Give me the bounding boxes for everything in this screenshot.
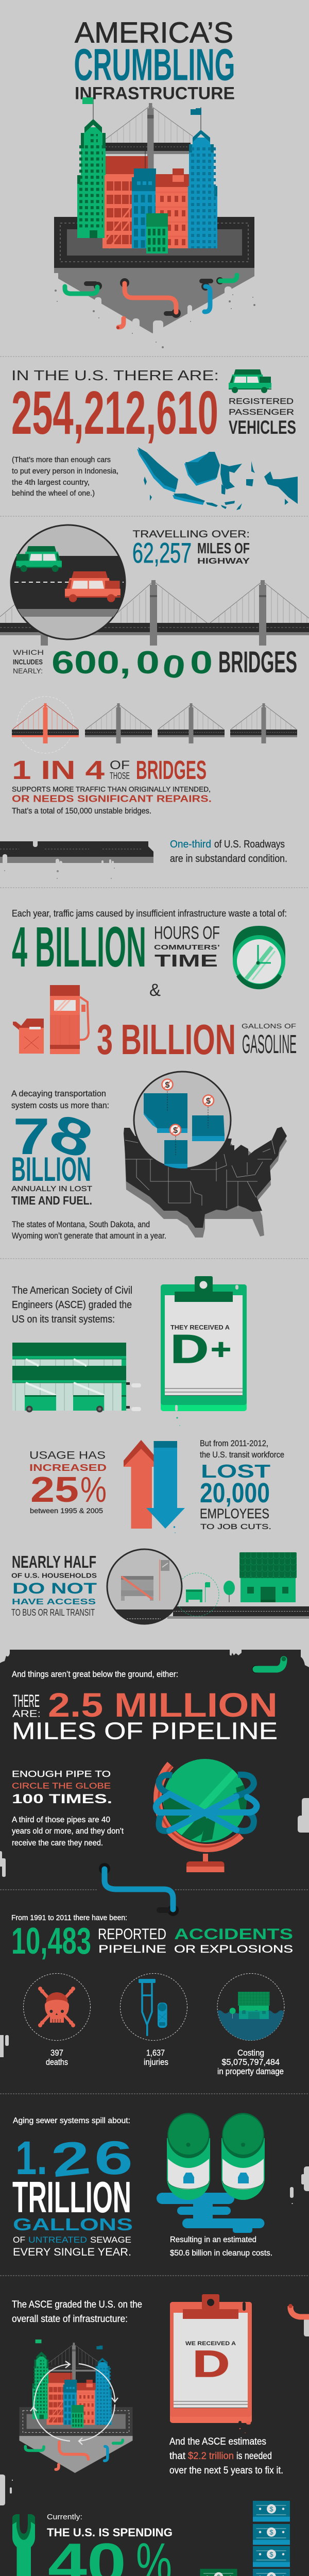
icon: red car in lens	[65, 571, 121, 602]
stat: commuters' time: COMMUTERS’	[154, 943, 220, 951]
icon: green car	[229, 369, 271, 393]
labels: deaths, injuries, damage	[46, 2048, 284, 2076]
pipe: green top right	[252, 1657, 286, 1673]
stat: 78 billion: 7	[13, 1108, 50, 1165]
text: overall grade intro	[12, 2299, 142, 2325]
stat: pipeline accidents: OR EXPLOSIONS	[174, 1943, 293, 1955]
icon: no-dollar signs: $	[173, 1126, 178, 1135]
magnifier: cars on the highway	[11, 525, 125, 639]
text: circle the globe: CIRCLE THE GLOBE	[12, 1782, 111, 1791]
text: circle the globe: A third of those pipes are 40	[12, 1816, 110, 1824]
stat: workforce lost: the U.S. transit workforce	[200, 1450, 284, 1460]
stat: bridges: WHICH	[13, 648, 44, 656]
text: Indonesia comparison: to put every person in Indonesia,	[12, 467, 118, 476]
stat: households without transit: HAVE ACCESS	[12, 1598, 96, 1606]
stat: workforce lost: But from 2011-2012,	[200, 1438, 268, 1448]
stat: highway miles	[132, 529, 250, 569]
text: Indonesia comparison: (That’s more than enough cars	[12, 455, 111, 464]
icon: green car in lens	[16, 546, 62, 572]
text: overall grade intro: overall state of infrastructure:	[12, 2314, 128, 2325]
stat: bridges	[13, 645, 297, 686]
stat: bridges: 600,	[52, 645, 131, 681]
text: Indonesia comparison: behind the wheel of one.)	[12, 489, 95, 498]
ampersand: &	[149, 980, 161, 1000]
text: states comparison	[12, 1220, 166, 1241]
stat: highway miles: TRAVELLING OVER:	[133, 529, 250, 540]
illustration: row of four bridges, one highlighted	[12, 697, 297, 753]
text: cleanup costs: Resulting in an estimated	[170, 2235, 256, 2244]
stat: pipeline accidents: ACCIDENTS	[174, 1926, 293, 1943]
chart: recommended amount money stack: $	[269, 2529, 273, 2536]
text: circle the globe: receive the care they need.	[12, 1839, 103, 1848]
magnifier: no bus stop	[107, 1549, 182, 1625]
text: roadways: One-third	[170, 839, 211, 850]
stat: 1 in 4 bridges: SUPPORTS MORE TRAFFIC THAN ORIGINALLY INTENDED,	[12, 785, 211, 793]
stat: 78 billion	[11, 1089, 109, 1207]
stat: gallons of gasoline: 3 BILLION	[97, 1015, 236, 1063]
text: ASCE estimate: $2.2 trillion	[188, 2451, 234, 2462]
stat: bridges: NEARLY:	[13, 667, 43, 675]
text: cleanup costs: $50.6 billion in cleanup costs.	[170, 2249, 272, 2258]
icon: gas pump	[50, 985, 89, 1054]
illustration: suspension bridge	[0, 580, 309, 646]
icon: skull and crossbones	[24, 1973, 91, 2040]
stat: usage increased: INCREASED	[29, 1463, 107, 1473]
icon: fuel can	[13, 1019, 44, 1054]
stat: bridges: INCLUDES	[13, 657, 43, 666]
stat: 78 billion: system costs us more than:	[11, 1101, 109, 1110]
stat: pipeline miles: THERE	[13, 1691, 40, 1711]
stat: workforce lost: TO JOB CUTS.	[200, 1522, 271, 1531]
labels: deaths, injuries, damage: in property damage	[217, 2066, 284, 2076]
text: Indonesia comparison	[12, 455, 118, 498]
stat: highway miles: MILES OF	[197, 540, 250, 557]
stat: pipeline accidents: 10,483	[11, 1921, 91, 1962]
icon: wrench	[12, 2514, 35, 2576]
text: circle the globe: 100 TIMES.	[12, 1792, 112, 1806]
stat: usage increased: USAGE HAS	[29, 1450, 106, 1461]
stat: 1 in 4 bridges: That’s a total of 150,000 unstable bridges.	[12, 807, 151, 816]
stat: sewage spilled: Aging sewer systems spill about:	[13, 2116, 130, 2125]
icon: no-dollar signs: $	[165, 1081, 170, 1090]
stat: commuters' time: TIME	[154, 951, 218, 970]
stat: 78 billion: BILLION	[11, 1150, 91, 1188]
text: ASCE estimate: over the next 5 years to fix it.	[169, 2465, 283, 2476]
stat: households without transit: NEARLY HALF	[12, 1552, 96, 1571]
labels: deaths, injuries, damage: 397	[50, 2048, 63, 2058]
stat: bridges: 0	[160, 648, 187, 686]
icon: flooded house	[216, 1973, 284, 2043]
stat: workforce lost: LOST	[201, 1461, 270, 1482]
text: roadways	[170, 839, 287, 865]
text: ASCE transit grade: Engineers (ASCE) graded the	[12, 1299, 132, 1311]
stat: sewage spilled	[12, 2116, 133, 2258]
illustration: clipboard grade D: D	[193, 2344, 230, 2385]
stat: 1 in 4 bridges: OF	[110, 758, 130, 772]
stat: bridges: 0	[190, 645, 213, 681]
stat: commuters' time: 4 BILLION	[12, 916, 146, 979]
text: Indonesia comparison: the 4th largest country,	[12, 478, 90, 487]
stat: highway miles: HIGHWAY	[197, 557, 250, 566]
stat: sewage spilled: 1.	[15, 2132, 47, 2184]
stat: sewage spilled: UNTREATED	[28, 2235, 87, 2245]
illustration: clipboard grade D+: THEY RECEIVED A	[170, 1325, 230, 1331]
stat: sewage spilled: 2	[49, 2131, 93, 2188]
stat: pipeline accidents	[11, 1914, 293, 1962]
stat: 78 billion: ANNUALLY IN LOST	[11, 1184, 92, 1193]
text: ASCE estimate: And the ASCE estimates	[169, 2436, 266, 2447]
stat: 40 percent spending: THE U.S. IS SPENDING	[47, 2526, 173, 2539]
text: circle the globe	[12, 1769, 124, 1848]
stat: highway miles: 62,257	[132, 537, 192, 569]
stat: usage increased	[29, 1450, 107, 1515]
panel: light upper section	[0, 0, 309, 1654]
illustration: double-decker bus	[12, 1343, 141, 1413]
stat: workforce lost: 20,000	[200, 1478, 270, 1509]
illustration: sewer pipes and puddle	[157, 2113, 265, 2233]
stat: 1 in 4 bridges: THOSE	[110, 771, 130, 781]
stat: gallons of gasoline: GALLONS OF	[242, 1022, 296, 1030]
stat: pipeline miles: And things aren’t great below the ground, either:	[12, 1669, 178, 1679]
stat: 1 in 4 bridges: OR NEEDS SIGNIFICANT REPAIRS.	[12, 793, 212, 804]
pipe: blue across divider	[99, 1863, 179, 1916]
title: INFRASTRUCTURE	[75, 83, 235, 103]
illustration: clipboard grade D: WE RECEIVED A	[185, 2341, 236, 2347]
text: ASCE estimate: is needed	[236, 2451, 272, 2462]
stat: households without transit	[11, 1552, 97, 1618]
labels: deaths, injuries, damage: Costing	[237, 2048, 264, 2058]
chart: recommended amount money stack	[253, 2501, 290, 2576]
stat: pipeline accidents: PIPELINE	[98, 1943, 166, 1955]
stat: households without transit: TO BUS OR RAIL TRANSIT	[11, 1607, 95, 1618]
illustration: clipboard grade D+: D	[170, 1326, 209, 1371]
stat: households without transit: DO NOT	[12, 1580, 97, 1597]
stat: registered vehicles: REGISTERED	[229, 397, 294, 406]
text: states comparison: Wyoming won’t generate that amount in a year.	[12, 1231, 166, 1241]
decorative light drips	[0, 1650, 309, 2576]
stat: usage increased: 25	[30, 1469, 79, 1510]
illustration: clipboard grade D+	[161, 1276, 247, 1426]
stat: workforce lost	[200, 1438, 284, 1531]
labels: deaths, injuries, damage: deaths	[46, 2057, 68, 2067]
chart: recommended amount money stack: $	[269, 2550, 273, 2558]
map: Indonesia	[137, 447, 298, 510]
stat: pipeline miles	[12, 1669, 278, 1744]
icon: clock	[233, 926, 285, 989]
text: cleanup costs	[170, 2235, 272, 2258]
stat: commuters' time: Each year, traffic jams caused by insufficient infrastructure waste a total of:	[12, 908, 287, 919]
illustration: road, bus stop and house	[167, 1552, 309, 1619]
icon: crutch and bandaged foot	[121, 1973, 187, 2040]
title: AMERICA’S	[75, 16, 233, 49]
illustration: clipboard grade D+: +	[211, 1333, 231, 1365]
stat: households without transit: OF U.S. HOUSEHOLDS	[11, 1572, 97, 1580]
text: circle the globe: years old or more, and they don’t	[12, 1827, 124, 1836]
stat: pipeline miles: ARE:	[12, 1708, 41, 1719]
text: circle the globe: ENOUGH PIPE TO	[12, 1769, 111, 1779]
stat: sewage spilled: TRILLION	[12, 2173, 131, 2222]
stat: 1 in 4 bridges	[12, 755, 212, 816]
stat: commuters' time: HOURS OF	[154, 923, 220, 943]
illustration: globe wrapped in pipe	[156, 1759, 256, 1872]
stat: 40 percent spending	[47, 2513, 173, 2576]
stat: sewage spilled: GALLONS	[13, 2215, 133, 2234]
text: roadways: are in substandard condition.	[170, 853, 287, 865]
stat: registered vehicles: PASSENGER	[229, 408, 294, 417]
stat: sewage spilled: OF	[13, 2235, 25, 2245]
stat: bridges: 0	[136, 645, 160, 681]
stat: 78 billion: TIME AND FUEL.	[11, 1194, 92, 1207]
stat: usage increased: between 1995 & 2005	[30, 1506, 103, 1515]
chart: current spending money stack	[200, 2569, 237, 2576]
stat: 1 in 4 bridges: BRIDGES	[136, 755, 207, 785]
illustration: cracked road	[0, 839, 153, 879]
text: overall grade intro: The ASCE graded the U.S. on the	[12, 2299, 142, 2310]
stat: usage increased: %	[80, 1469, 107, 1510]
stat: workforce lost: EMPLOYEES	[200, 1506, 269, 1521]
stat: 78 billion: 8	[43, 1103, 100, 1170]
magnifier lens: Montana, South Dakota, Wyoming	[134, 1072, 231, 1168]
stat: pipeline accidents: From 1991 to 2011 there have been:	[11, 1914, 127, 1922]
text: ASCE transit grade: US on its transit systems:	[12, 1314, 115, 1325]
text: ASCE estimate: that	[169, 2451, 186, 2462]
stat: sewage spilled: 6	[94, 2132, 133, 2184]
icon: up and down arrows	[124, 1440, 185, 1533]
stat: 40 percent spending: Currently:	[47, 2513, 82, 2521]
illustration: clipboard grade D	[170, 2294, 252, 2433]
labels: deaths, injuries, damage: $5,075,797,484	[221, 2057, 280, 2067]
stat: pipeline accidents: REPORTED	[98, 1926, 166, 1943]
stat: pipeline miles: 2.5 MILLION	[48, 1686, 278, 1724]
chart: recommended amount money stack: $	[269, 2505, 273, 2513]
text: ASCE transit grade	[12, 1285, 132, 1325]
stat: 1 in 4 bridges: 1 IN 4	[12, 755, 105, 785]
text: roadways: of U.S. Roadways	[214, 839, 285, 850]
pipe: red right edge	[288, 2304, 309, 2317]
stat: sewage spilled: SEWAGE	[90, 2235, 131, 2245]
icon: no-dollar signs	[162, 1079, 214, 1136]
illustration: small city with cycle arrows	[19, 2340, 133, 2473]
text: ASCE estimate	[169, 2436, 283, 2476]
labels: deaths, injuries, damage: 1,637	[146, 2048, 165, 2058]
stat: 78 billion: A decaying transportation	[11, 1089, 106, 1098]
map: United States with magnifier	[124, 1072, 287, 1238]
panel: dark lower section	[0, 1650, 309, 2576]
illustration: city on crumbling ground	[54, 97, 255, 348]
title	[74, 16, 235, 103]
stat: registered vehicles: IN THE U.S. THERE ARE:	[11, 367, 219, 383]
icon: no-dollar signs: $	[206, 1097, 211, 1106]
stat: sewage spilled: EVERY SINGLE YEAR.	[13, 2246, 131, 2258]
text: ASCE transit grade: The American Society of Civil	[12, 1285, 132, 1296]
text: states comparison: The states of Montana, South Dakota, and	[12, 1220, 150, 1229]
stat: pipeline miles: MILES OF PIPELINE	[12, 1718, 278, 1744]
labels: deaths, injuries, damage: injuries	[144, 2057, 168, 2067]
